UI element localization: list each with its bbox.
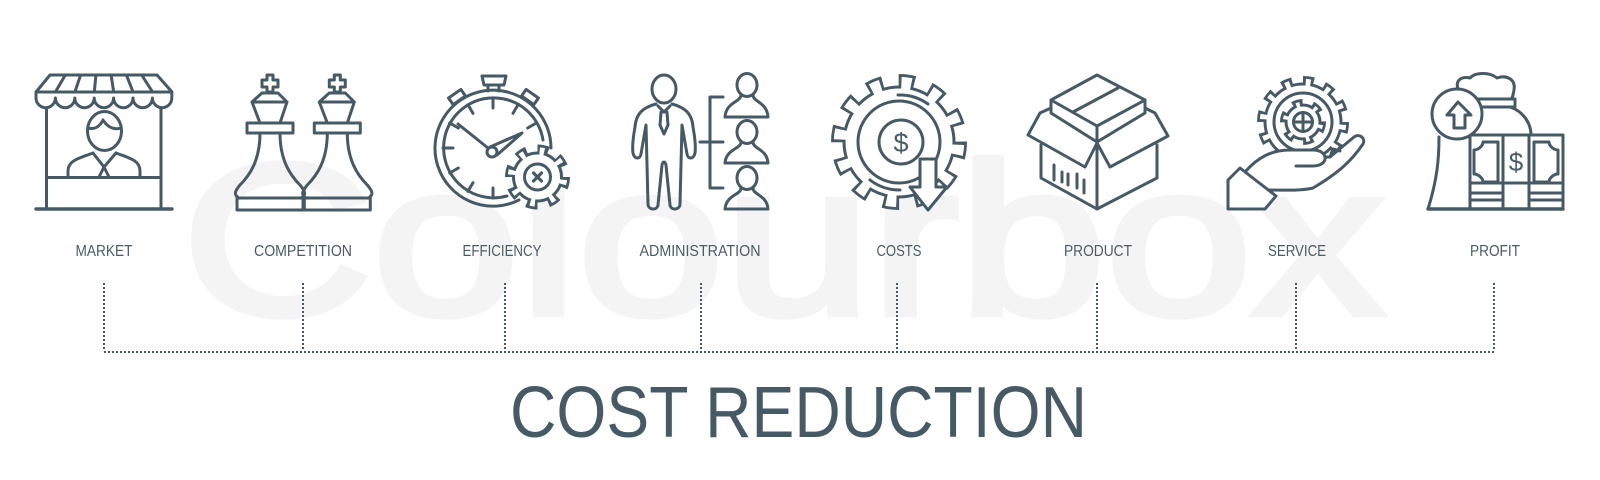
- icon: service hand with gear: [1228, 80, 1364, 209]
- label: efficiency: EFFICIENCY: [462, 243, 542, 260]
- label: competition: COMPETITION: [254, 243, 352, 260]
- label: market: MARKET: [76, 243, 133, 260]
- icon: costs gear with dollar: [838, 80, 960, 210]
- dollar sign on costs gear: $: [893, 128, 909, 158]
- icon: administration hierarchy: [633, 74, 768, 209]
- icon: market: [36, 75, 172, 209]
- label: service: SERVICE: [1268, 243, 1326, 260]
- icon: profit money bag and banknotes: [1428, 74, 1563, 209]
- label: costs: COSTS: [876, 243, 922, 260]
- label: product: PRODUCT: [1064, 243, 1132, 260]
- watermark: Colourbox: [182, 119, 1384, 360]
- icon: efficiency stopwatch: [435, 76, 566, 206]
- dotted connector tree: [104, 283, 1495, 352]
- label: profit: PROFIT: [1470, 243, 1520, 260]
- label: administration: ADMINISTRATION: [640, 243, 760, 260]
- title: COST REDUCTION: [510, 373, 1087, 453]
- dollar sign on banknote: $: [1509, 147, 1524, 177]
- icon: product box: [1028, 75, 1168, 209]
- icon: competition chess kings: [235, 75, 372, 210]
